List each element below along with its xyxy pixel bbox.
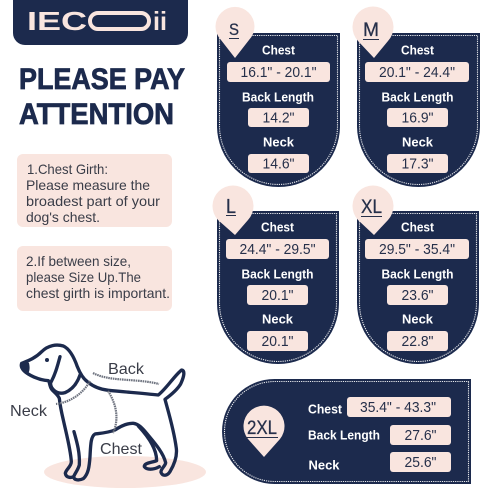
note: size up: 2.If between size, — [26, 253, 131, 269]
title: ATTENTION — [19, 98, 174, 131]
size card: S: 14.2" — [262, 110, 294, 126]
size card: XL: Chest — [401, 220, 435, 234]
dog measurement diagram: Back — [108, 361, 145, 378]
size card: S: S — [229, 20, 239, 39]
size card: 2XL: 27.6" — [404, 428, 436, 444]
note: chest girth — [17, 154, 172, 227]
size card: XL — [352, 186, 479, 364]
size card: 2XL: 25.6" — [404, 455, 436, 471]
note: chest girth: 1.Chest Girth: — [27, 161, 108, 177]
size card: S: Neck — [263, 134, 295, 150]
size card: M: Chest — [401, 42, 435, 58]
dog measurement diagram: Chest — [100, 441, 143, 458]
size card: S — [216, 7, 340, 187]
brand header — [13, 0, 188, 45]
brand header: ii — [153, 6, 167, 36]
size card: L: 20.1" — [262, 288, 294, 304]
size card: XL: Back Length — [382, 266, 454, 282]
size card: M: 20.1" - 24.4" — [379, 65, 455, 81]
size card: S: 16.1" - 20.1" — [240, 65, 316, 81]
size card: L: Back Length — [242, 266, 314, 282]
dog measurement diagram — [10, 345, 206, 488]
size card: 2XL: Chest — [308, 402, 343, 416]
size card: L: Neck — [262, 312, 294, 326]
size card: M: M — [363, 20, 379, 41]
size card: L: L — [226, 196, 236, 218]
note: chest girth: dog's chest. — [26, 209, 100, 225]
size card: 2XL: Neck — [308, 458, 340, 472]
size card: L: 24.4" - 29.5" — [240, 242, 316, 258]
size card: L: Chest — [261, 220, 295, 234]
note: size up: chest girth is important. — [26, 285, 170, 301]
size card: 2XL: 2XL — [247, 418, 277, 439]
size card: M: 16.9" — [402, 110, 434, 126]
note: chest girth: Please measure the — [26, 177, 150, 193]
size card: M: Neck — [402, 134, 434, 150]
size card: 2XL — [222, 379, 471, 484]
note: size up — [17, 246, 172, 311]
size card: 2XL: Back Length — [308, 428, 380, 442]
size card: 2XL: 35.4" - 43.3" — [360, 400, 436, 416]
size card: XL: 22.8" — [402, 334, 434, 350]
size card: S: Chest — [262, 42, 296, 58]
measuring tapes — [56, 373, 159, 433]
note: size up: please Size Up.The — [26, 269, 141, 285]
size card: M: Back Length — [382, 90, 454, 104]
size card: M — [353, 7, 480, 187]
size card: S: 14.6" — [262, 156, 294, 172]
size card: S: Back Length — [242, 90, 314, 104]
size card: XL: Neck — [402, 312, 434, 326]
note: chest girth: broadest part of your — [26, 193, 160, 209]
size card: XL: XL — [361, 197, 382, 218]
title — [19, 63, 185, 131]
size card: L — [212, 186, 339, 364]
size card: XL: 23.6" — [402, 288, 434, 304]
dog measurement diagram: Neck — [10, 403, 48, 420]
title: PLEASE PAY — [19, 63, 185, 96]
size card: L: 20.1" — [262, 334, 294, 350]
size card: XL: 29.5" - 35.4" — [379, 242, 455, 258]
brand header: IEC — [27, 6, 87, 36]
size card: M: 17.3" — [402, 156, 434, 172]
